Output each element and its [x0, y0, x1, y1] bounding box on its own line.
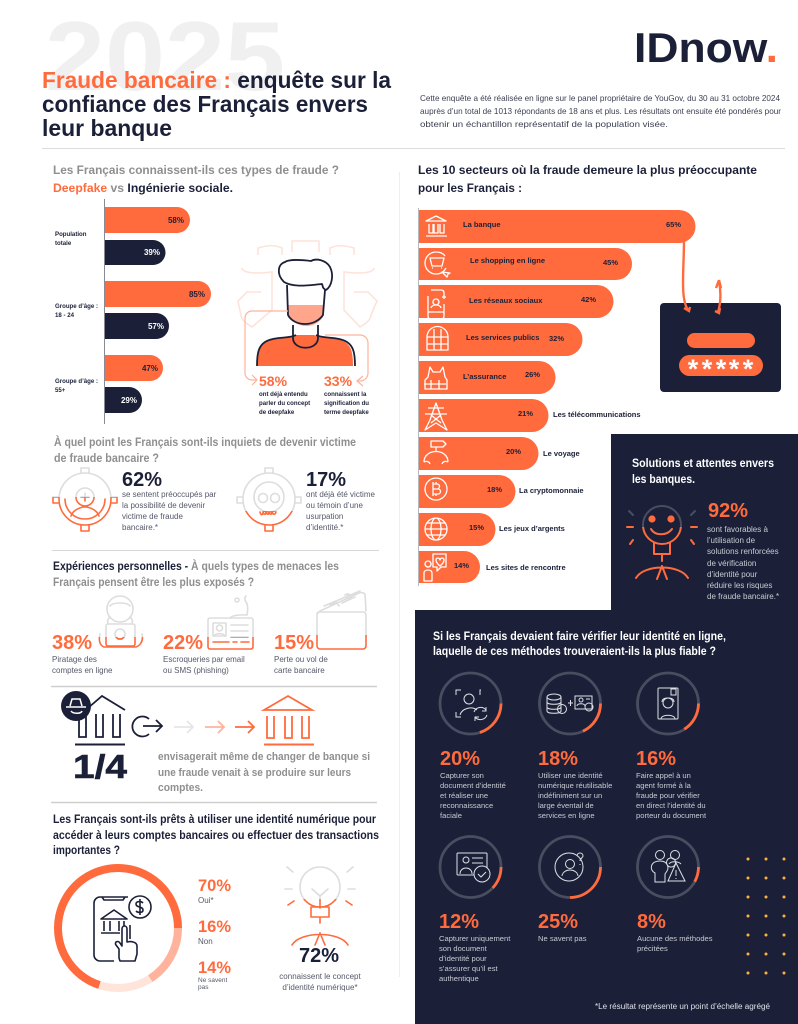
- stats: methods row 2: précitées: [637, 944, 668, 953]
- stat: 17% victim: d’identité.*: [306, 523, 343, 532]
- stat: 22% phishing: [163, 632, 245, 675]
- heading: fraud types: Deepfake vs Ingénierie sociale.: [53, 181, 233, 195]
- stat: 92%: [707, 500, 779, 601]
- stat: 17% victim: 17%: [306, 469, 346, 491]
- stat: 72% know concept: [279, 945, 361, 992]
- stats: methods row 1: fraude pour vérifier: [636, 791, 700, 800]
- stats: methods row 1: 18%: [538, 748, 578, 770]
- stat: 92%: réduire les risques: [707, 581, 772, 590]
- stat: 92%: d’identité pour: [707, 570, 758, 579]
- password box: [660, 303, 781, 392]
- stat: 72% know concept: connaissent le concept: [279, 972, 361, 981]
- stat: 33% know meaning: [324, 373, 369, 416]
- bar chart: deepfake vs social engineering: 18 - 24: [55, 312, 75, 319]
- stat: 38% hacking: Piratage des: [52, 655, 97, 664]
- bar chart: sectors: Les télécommunications: [553, 410, 641, 419]
- stat: 62% worried: 62%: [122, 469, 162, 491]
- stats: methods row 2: Ne savent pas: [538, 934, 587, 943]
- stats: methods row 1: large éventail de: [538, 801, 594, 810]
- text: would change bank: [158, 751, 370, 794]
- stats: methods row 1: indéfiniment sur un: [538, 791, 602, 800]
- bar chart: deepfake vs social engineering: 57%: [148, 322, 164, 331]
- illustration: deepfake person: [238, 241, 377, 386]
- stat: 22% phishing: 22%: [163, 632, 203, 654]
- bar chart: sectors: 65%: [666, 220, 681, 229]
- panel: solutions: Solutions et attentes envers: [632, 458, 774, 470]
- stat: 33% know meaning: signification du: [324, 400, 369, 407]
- title: [42, 67, 391, 141]
- heading: sectors: Les 10 secteurs où la fraude demeure la plus préoccupante: [418, 163, 757, 177]
- stats: methods row 1: porteur du document: [636, 811, 707, 820]
- text: would change bank: comptes.: [158, 782, 203, 794]
- bar chart: sectors: 21%: [518, 409, 533, 418]
- title: Fraude bancaire : enquête sur la: [42, 67, 391, 93]
- bar chart: sectors: La banque: [463, 220, 501, 229]
- panel: identity methods: [415, 610, 798, 1024]
- stat: 15% card: [274, 632, 328, 675]
- stat: 22% phishing: ou SMS (phishing): [163, 666, 229, 675]
- icon: navy bank with spy: [61, 691, 125, 744]
- stat: 72% know concept: 72%: [299, 945, 339, 967]
- heading: sectors: pour les Français :: [418, 181, 522, 195]
- password box: *: [743, 354, 754, 384]
- stat: 1 in 4: 1/4: [73, 748, 128, 785]
- dot grid: [746, 858, 786, 974]
- bar chart: sectors: 18%: [487, 485, 502, 494]
- heading: personal experience: Expériences personnelles - À quels types de menaces les: [53, 559, 339, 573]
- stat: 14% dont know: [198, 959, 231, 991]
- stat: 58% heard of deepfake: [259, 373, 310, 416]
- stat: 16% no: [198, 918, 231, 946]
- bar chart: sectors: Le shopping en ligne: [470, 256, 545, 265]
- stat: 17% victim: [306, 469, 375, 532]
- stat: 14% dont know: 14%: [198, 959, 231, 977]
- password box: *: [702, 354, 713, 384]
- bar chart: sectors: Les réseaux sociaux: [469, 296, 543, 305]
- stat: 17% victim: ont déjà été victime: [306, 490, 375, 499]
- heading: digital identity: accéder à leurs comptes bancaires ou effectuer des transactions: [53, 828, 379, 842]
- stat: 92%: l’utilisation de: [707, 536, 756, 545]
- stat: 58% heard of deepfake: 58%: [259, 373, 288, 389]
- icon: smiling lightbulb: [627, 506, 697, 579]
- stat: 38% hacking: [52, 632, 113, 675]
- stats: methods row 2: Capturer uniquement: [439, 934, 511, 943]
- bar chart: sectors: Les sites de rencontre: [486, 563, 566, 572]
- stats: methods row 1: et réaliser une: [440, 791, 488, 800]
- stat: 70% yes: [198, 877, 231, 905]
- bar chart: sectors: L’assurance: [463, 372, 506, 381]
- stat: 62% worried: se sentent préoccupés par: [122, 490, 217, 499]
- stats: methods row 2: son document: [439, 944, 488, 953]
- stats: methods row 2: s’assurer qu’il est: [439, 964, 499, 973]
- stat: 62% worried: [122, 469, 217, 532]
- heading: digital identity: importantes ?: [53, 843, 120, 857]
- bar chart: sectors: Les services publics: [466, 333, 539, 342]
- stat: 62% worried: bancaire.*: [122, 523, 158, 532]
- stat: 92%: sont favorables à: [707, 525, 768, 534]
- icon: target skull: [237, 468, 301, 531]
- heading: personal experience: Français pensent être les plus exposés ?: [53, 575, 254, 589]
- stat: 16% no: Non: [198, 937, 213, 946]
- stats: methods row 1: Utiliser une identité: [538, 771, 603, 780]
- bar chart: deepfake vs social engineering: 58%: [168, 216, 184, 225]
- stat: 62% worried: victime de fraude: [122, 512, 183, 521]
- stat: 17% victim: ou témoin d’une: [306, 501, 363, 510]
- bar chart: sectors: La cryptomonnaie: [519, 486, 584, 495]
- bar chart: deepfake vs social engineering: 39%: [144, 248, 160, 257]
- icon: wallet: [317, 591, 366, 649]
- stats: methods row 2: authentique: [439, 974, 479, 983]
- stat: 22% phishing: Escroqueries par email: [163, 655, 245, 664]
- title: confiance des Français envers: [42, 91, 368, 117]
- stat: 38% hacking: comptes en ligne: [52, 666, 113, 675]
- bar chart: deepfake vs social engineering: 55+: [55, 387, 66, 394]
- stat: 33% know meaning: connaissent la: [324, 391, 367, 398]
- icon: orange bank: [264, 696, 314, 744]
- ring icons: [456, 688, 685, 882]
- text: would change bank: une fraude venait à se produire sur leurs: [158, 767, 351, 779]
- heading: fraud types: Les Français connaissent-ils ces types de fraude ?: [53, 163, 339, 177]
- icon: target person: [53, 468, 117, 531]
- stats: methods row 2: [439, 911, 713, 983]
- donut chart: digital identity: [58, 868, 178, 988]
- bar chart: sectors: 15%: [469, 523, 484, 532]
- bar chart: sectors: 42%: [581, 295, 596, 304]
- heading: methods: laquelle de ces méthodes trouveraient-ils la plus fiable ?: [433, 646, 716, 658]
- stats: methods row 2: 25%: [538, 911, 578, 933]
- stat: 38% hacking: 38%: [52, 632, 92, 654]
- bar chart: deepfake vs social engineering: Groupe d’âge :: [55, 378, 98, 385]
- bar chart: deepfake vs social engineering: 85%: [189, 290, 205, 299]
- stat: 33% know meaning: 33%: [324, 373, 353, 389]
- stat: 70% yes: Oui*: [198, 896, 214, 905]
- stat: 92%: de vérification: [707, 559, 756, 568]
- intro text: Cette enquête a été réalisée en ligne sur le panel propriétaire de YouGov, du 30 au 31 octobre 2024: [420, 94, 780, 103]
- arrows: connecting bar to password box: [683, 240, 721, 313]
- stats: methods row 1: Faire appel à un: [636, 771, 691, 780]
- stat: 16% no: 16%: [198, 918, 231, 936]
- bar chart: deepfake vs social engineering: Population: [55, 231, 87, 238]
- stat: 58% heard of deepfake: ont déjà entendu: [259, 391, 308, 398]
- stat: 33% know meaning: terme deepfake: [324, 409, 369, 416]
- progress rings: [440, 673, 698, 898]
- stat: 70% yes: 70%: [198, 877, 231, 895]
- icon: lightbulb: [285, 867, 355, 945]
- panel: solutions: les banques.: [632, 474, 695, 486]
- stat: 15% card: Perte ou vol de: [274, 655, 328, 664]
- text: would change bank: envisagerait même de changer de banque si: [158, 751, 370, 763]
- stats: methods row 1: [440, 748, 707, 820]
- stats: methods row 1: agent formé à la: [636, 781, 692, 790]
- stats: methods row 1: Capturer son: [440, 771, 484, 780]
- stat: 15% card: 15%: [274, 632, 314, 654]
- bar chart: sectors: 26%: [525, 370, 540, 379]
- logo: IDnow.: [634, 24, 778, 71]
- bar chart: deepfake vs social engineering: totale: [55, 240, 72, 247]
- icon: phone with bank: [94, 896, 151, 961]
- stats: methods row 1: en direct l’identité du: [636, 801, 706, 810]
- stats: methods row 1: 20%: [440, 748, 480, 770]
- bar chart: sectors: Les jeux d’argents: [499, 524, 565, 533]
- heading: worry: [54, 435, 356, 465]
- stat: 17% victim: usurpation: [306, 512, 343, 521]
- stat: 15% card: carte bancaire: [274, 666, 325, 675]
- stats: methods row 2: Aucune des méthodes: [637, 934, 713, 943]
- heading: worry: À quel point les Français sont-ils inquiets de devenir victime: [54, 435, 356, 449]
- password box: *: [688, 354, 699, 384]
- footnote: *Le résultat représente un point d’échelle agrégé: [595, 1002, 771, 1011]
- intro text: obtenir un échantillon représentatif de la population visée.: [420, 120, 668, 129]
- bar chart: sectors: 45%: [603, 258, 618, 267]
- icon: phishing card: [208, 596, 253, 649]
- heading: methods: Si les Français devaient faire vérifier leur identité en ligne,: [433, 631, 726, 643]
- heading: methods: [433, 631, 726, 658]
- stats: methods row 1: document d’identité: [440, 781, 506, 790]
- bar chart: sectors: 32%: [549, 334, 564, 343]
- stat: 14% dont know: pas: [198, 984, 209, 991]
- stats: methods row 2: 8%: [637, 911, 666, 933]
- bar chart: sectors: [418, 208, 696, 586]
- bar chart: deepfake vs social engineering: 29%: [121, 396, 137, 405]
- bar chart: deepfake vs social engineering: 47%: [142, 364, 158, 373]
- arrows: changing bank: [132, 716, 254, 737]
- intro text: [420, 94, 781, 129]
- bar chart: deepfake vs social engineering: [55, 199, 211, 424]
- heading: worry: de fraude bancaire ?: [54, 451, 159, 465]
- panel: solutions: [611, 434, 798, 610]
- stats: methods row 1: reconnaissance: [440, 801, 493, 810]
- year watermark: 2025: [45, 1, 285, 111]
- bar chart: sectors: 14%: [454, 561, 469, 570]
- stats: methods row 2: d’identité pour: [439, 954, 487, 963]
- icon: hacker: [99, 596, 142, 647]
- stat: 62% worried: la possibilité de devenir: [122, 501, 205, 510]
- stats: methods row 1: numérique réutilisable: [538, 781, 612, 790]
- bar chart: deepfake vs social engineering: Groupe d’âge :: [55, 303, 98, 310]
- stat: 72% know concept: d’identité numérique*: [282, 983, 358, 992]
- stat: 92%: solutions renforcées: [707, 547, 779, 556]
- password box: *: [716, 354, 727, 384]
- bar chart: sectors: Le voyage: [543, 449, 580, 458]
- heading: sectors: [418, 163, 757, 195]
- stat: 58% heard of deepfake: parler du concept: [259, 400, 310, 407]
- intro text: auprès d’un total de 1013 répondants de 18 ans et plus. Les résultats ont ensuite été pondérés pour: [420, 107, 781, 116]
- stat: 58% heard of deepfake: de deepfake: [259, 409, 295, 416]
- stats: methods row 1: services en ligne: [538, 811, 595, 820]
- heading: digital identity: [53, 812, 379, 857]
- stat: 92%: de fraude bancaire.*: [707, 592, 779, 601]
- password box: *: [729, 354, 740, 384]
- stats: methods row 1: faciale: [440, 811, 462, 820]
- title: leur banque: [42, 115, 172, 141]
- stats: methods row 1: 16%: [636, 748, 676, 770]
- heading: fraud types: [53, 163, 339, 195]
- stats: methods row 2: 12%: [439, 911, 479, 933]
- bar chart: sectors: 20%: [506, 447, 521, 456]
- heading: digital identity: Les Français sont-ils prêts à utiliser une identité numérique pour: [53, 812, 376, 826]
- stat: 92%: 92%: [708, 500, 748, 522]
- heading: personal experience: [53, 559, 339, 589]
- stat: 14% dont know: Ne savent: [198, 977, 227, 984]
